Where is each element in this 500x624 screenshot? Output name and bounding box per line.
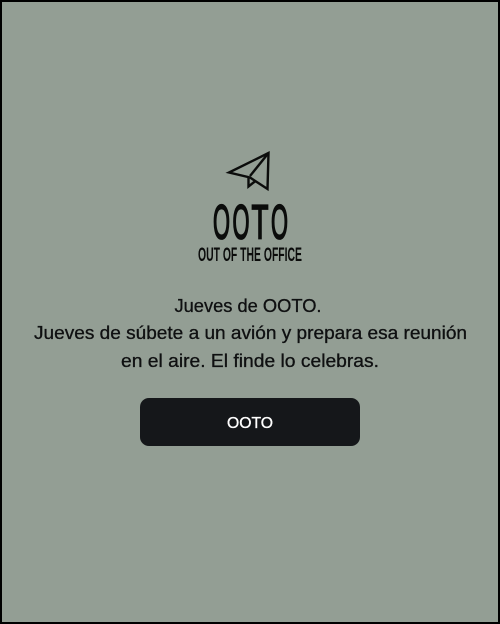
logo wordmark: [198, 196, 302, 266]
button label: OOTO: [227, 415, 273, 432]
logo: OOTO: O: [232, 196, 250, 250]
message line 3: en el aire. El finde lo celebras.: [121, 351, 379, 371]
logo wordmark: O: [271, 196, 288, 250]
logo: OOTO: O: [213, 196, 230, 250]
message text: [34, 296, 467, 371]
button: [140, 398, 360, 446]
logo tagline: OUT OF THE OFFICE: [198, 245, 302, 266]
icon: paper plane: [229, 153, 268, 189]
message line 1: Jueves de OOTO.: [174, 296, 322, 316]
logo: OOTO: T: [252, 196, 268, 250]
logo: OOTO: [213, 196, 288, 250]
message line 2: Jueves de súbete a un avión y prepara esa reunión: [34, 323, 467, 343]
button background: [140, 398, 360, 446]
